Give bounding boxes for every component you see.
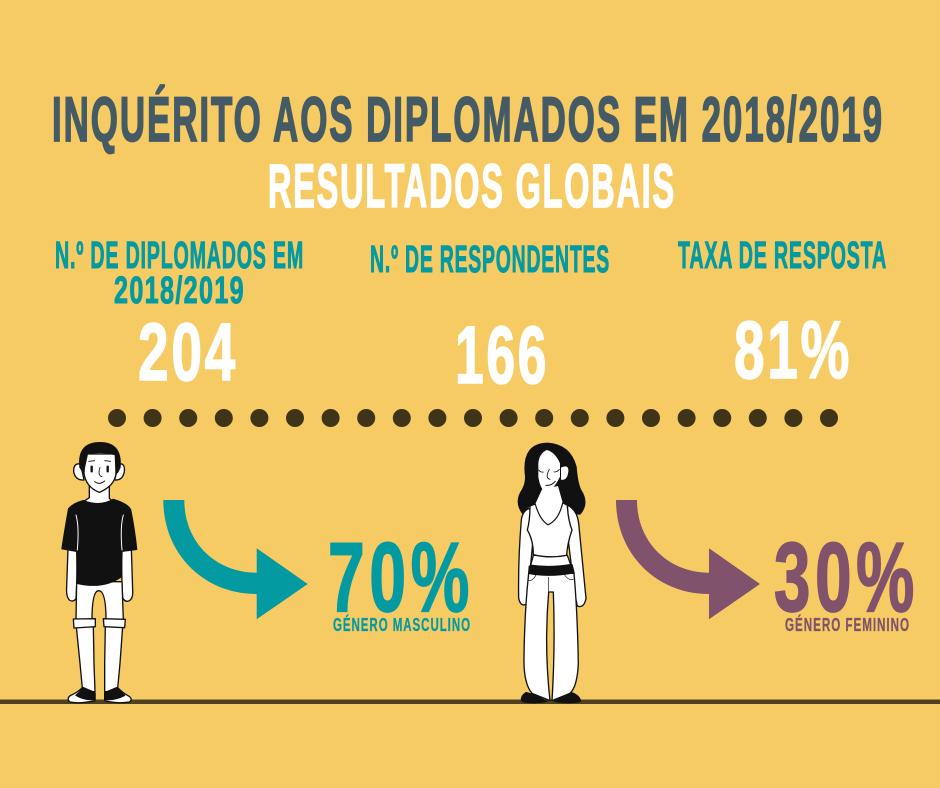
stat: respondents <box>370 239 610 401</box>
stat value: graduates: 204 <box>138 307 238 398</box>
icon: female figure <box>518 443 586 703</box>
dotted separator <box>108 409 838 427</box>
neck <box>83 485 114 507</box>
stat: response rate <box>678 235 887 396</box>
facial features <box>539 469 559 479</box>
stat: graduates <box>55 235 304 398</box>
stat label: graduates <box>55 235 304 312</box>
shorts cuffs <box>73 619 125 628</box>
shirt <box>62 499 137 585</box>
shirt seams <box>76 515 123 550</box>
arrow: male <box>163 500 308 619</box>
shoe uppers <box>76 688 125 700</box>
arms <box>67 548 133 601</box>
icon: male figure <box>62 443 137 703</box>
value: male percentage: 70% <box>328 522 474 632</box>
arrow: female <box>616 500 760 619</box>
stat label: graduates: 2018/2019 <box>114 270 245 312</box>
neckline <box>535 503 563 525</box>
ground line <box>0 700 940 704</box>
midriff <box>531 555 571 567</box>
face <box>538 450 560 493</box>
belt <box>529 565 574 575</box>
arms <box>519 505 586 607</box>
trouser details <box>528 573 573 592</box>
hair <box>80 443 120 473</box>
face <box>84 454 116 492</box>
ears <box>74 464 124 480</box>
legs <box>76 627 123 692</box>
ear <box>561 466 569 480</box>
shorts <box>76 582 123 620</box>
stat value: respondents: 166 <box>455 310 549 401</box>
trousers <box>524 573 578 701</box>
stat label: graduates: N.º DE DIPLOMADOS EM <box>55 235 304 277</box>
facial features <box>92 467 108 471</box>
shoes <box>68 687 95 703</box>
stat label: respondents: N.º DE RESPONDENTES <box>370 239 610 281</box>
stat value: response rate: 81% <box>734 305 852 396</box>
tank top <box>527 503 572 557</box>
label: male: GÉNERO MASCULINO <box>333 614 471 635</box>
hair back <box>518 443 585 514</box>
neck <box>535 486 563 525</box>
shoes <box>521 693 581 703</box>
